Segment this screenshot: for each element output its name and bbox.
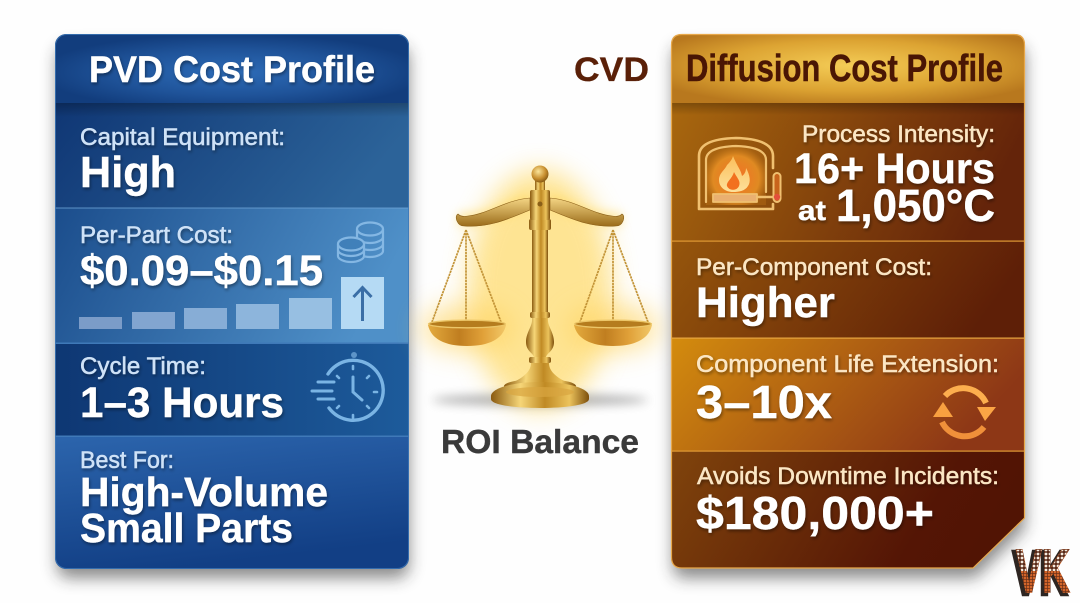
row: cycle time bbox=[80, 353, 284, 427]
row: process intensity bbox=[794, 121, 995, 231]
row: capital equipment bbox=[80, 124, 285, 197]
row: avoids downtime incidents: $180,000+ bbox=[696, 487, 934, 539]
row: best for: Small Parts bbox=[80, 505, 293, 551]
row: process intensity: Process Intensity: bbox=[802, 121, 995, 148]
row: cycle time: 1–3 Hours bbox=[80, 379, 284, 427]
row: component life extension: Component Life Extension: bbox=[696, 351, 999, 378]
row: best for: Best For: bbox=[80, 447, 174, 474]
beam bbox=[456, 198, 530, 226]
row: per-part cost: $0.09–$0.15 bbox=[80, 247, 323, 295]
row: capital equipment: High bbox=[80, 148, 176, 197]
label: CVD: CVD bbox=[574, 51, 649, 89]
logo: VK watermark bbox=[1011, 549, 1070, 596]
chains bbox=[432, 230, 648, 322]
row: process intensity: at bbox=[798, 195, 826, 226]
row: process intensity: 16+ Hours bbox=[794, 145, 995, 193]
row: best for: High-Volume bbox=[80, 469, 328, 515]
column bbox=[532, 230, 548, 318]
row: per-component cost: Per-Component Cost: bbox=[696, 254, 932, 281]
icon: stopwatch bbox=[312, 352, 383, 420]
row: per-part cost bbox=[80, 222, 323, 295]
row: component life extension: 3–10x bbox=[696, 376, 832, 428]
pans bbox=[428, 325, 506, 346]
icon: coins bbox=[338, 222, 383, 262]
row: avoids downtime incidents: Avoids Downtime Incidents: bbox=[697, 463, 999, 490]
row: avoids downtime incidents bbox=[696, 463, 999, 539]
row: per-part cost: Per-Part Cost: bbox=[80, 222, 233, 249]
icon: cycle arrows bbox=[933, 388, 996, 436]
icon: furnace with thermometer bbox=[699, 138, 780, 209]
row: per-component cost: Higher bbox=[696, 279, 835, 327]
row: per-component cost bbox=[696, 254, 932, 327]
panel: PVD cost profile bbox=[55, 34, 409, 578]
bar chart: rising per-part cost bbox=[79, 277, 384, 329]
row: cycle time: Cycle Time: bbox=[80, 353, 206, 380]
panel: diffusion cost profile bbox=[671, 34, 1025, 578]
row: process intensity: 1,050°C bbox=[836, 180, 995, 231]
heading: Diffusion Cost Profile: Diffusion Cost Profile bbox=[686, 48, 1003, 90]
heading: PVD Cost Profile: PVD Cost Profile bbox=[89, 49, 375, 90]
illustration: golden balance scale bbox=[421, 166, 659, 410]
row: best for bbox=[80, 447, 328, 551]
row: component life extension bbox=[696, 351, 999, 428]
row: capital equipment: Capital Equipment: bbox=[80, 124, 285, 151]
label: ROI Balance: ROI Balance bbox=[441, 423, 639, 460]
